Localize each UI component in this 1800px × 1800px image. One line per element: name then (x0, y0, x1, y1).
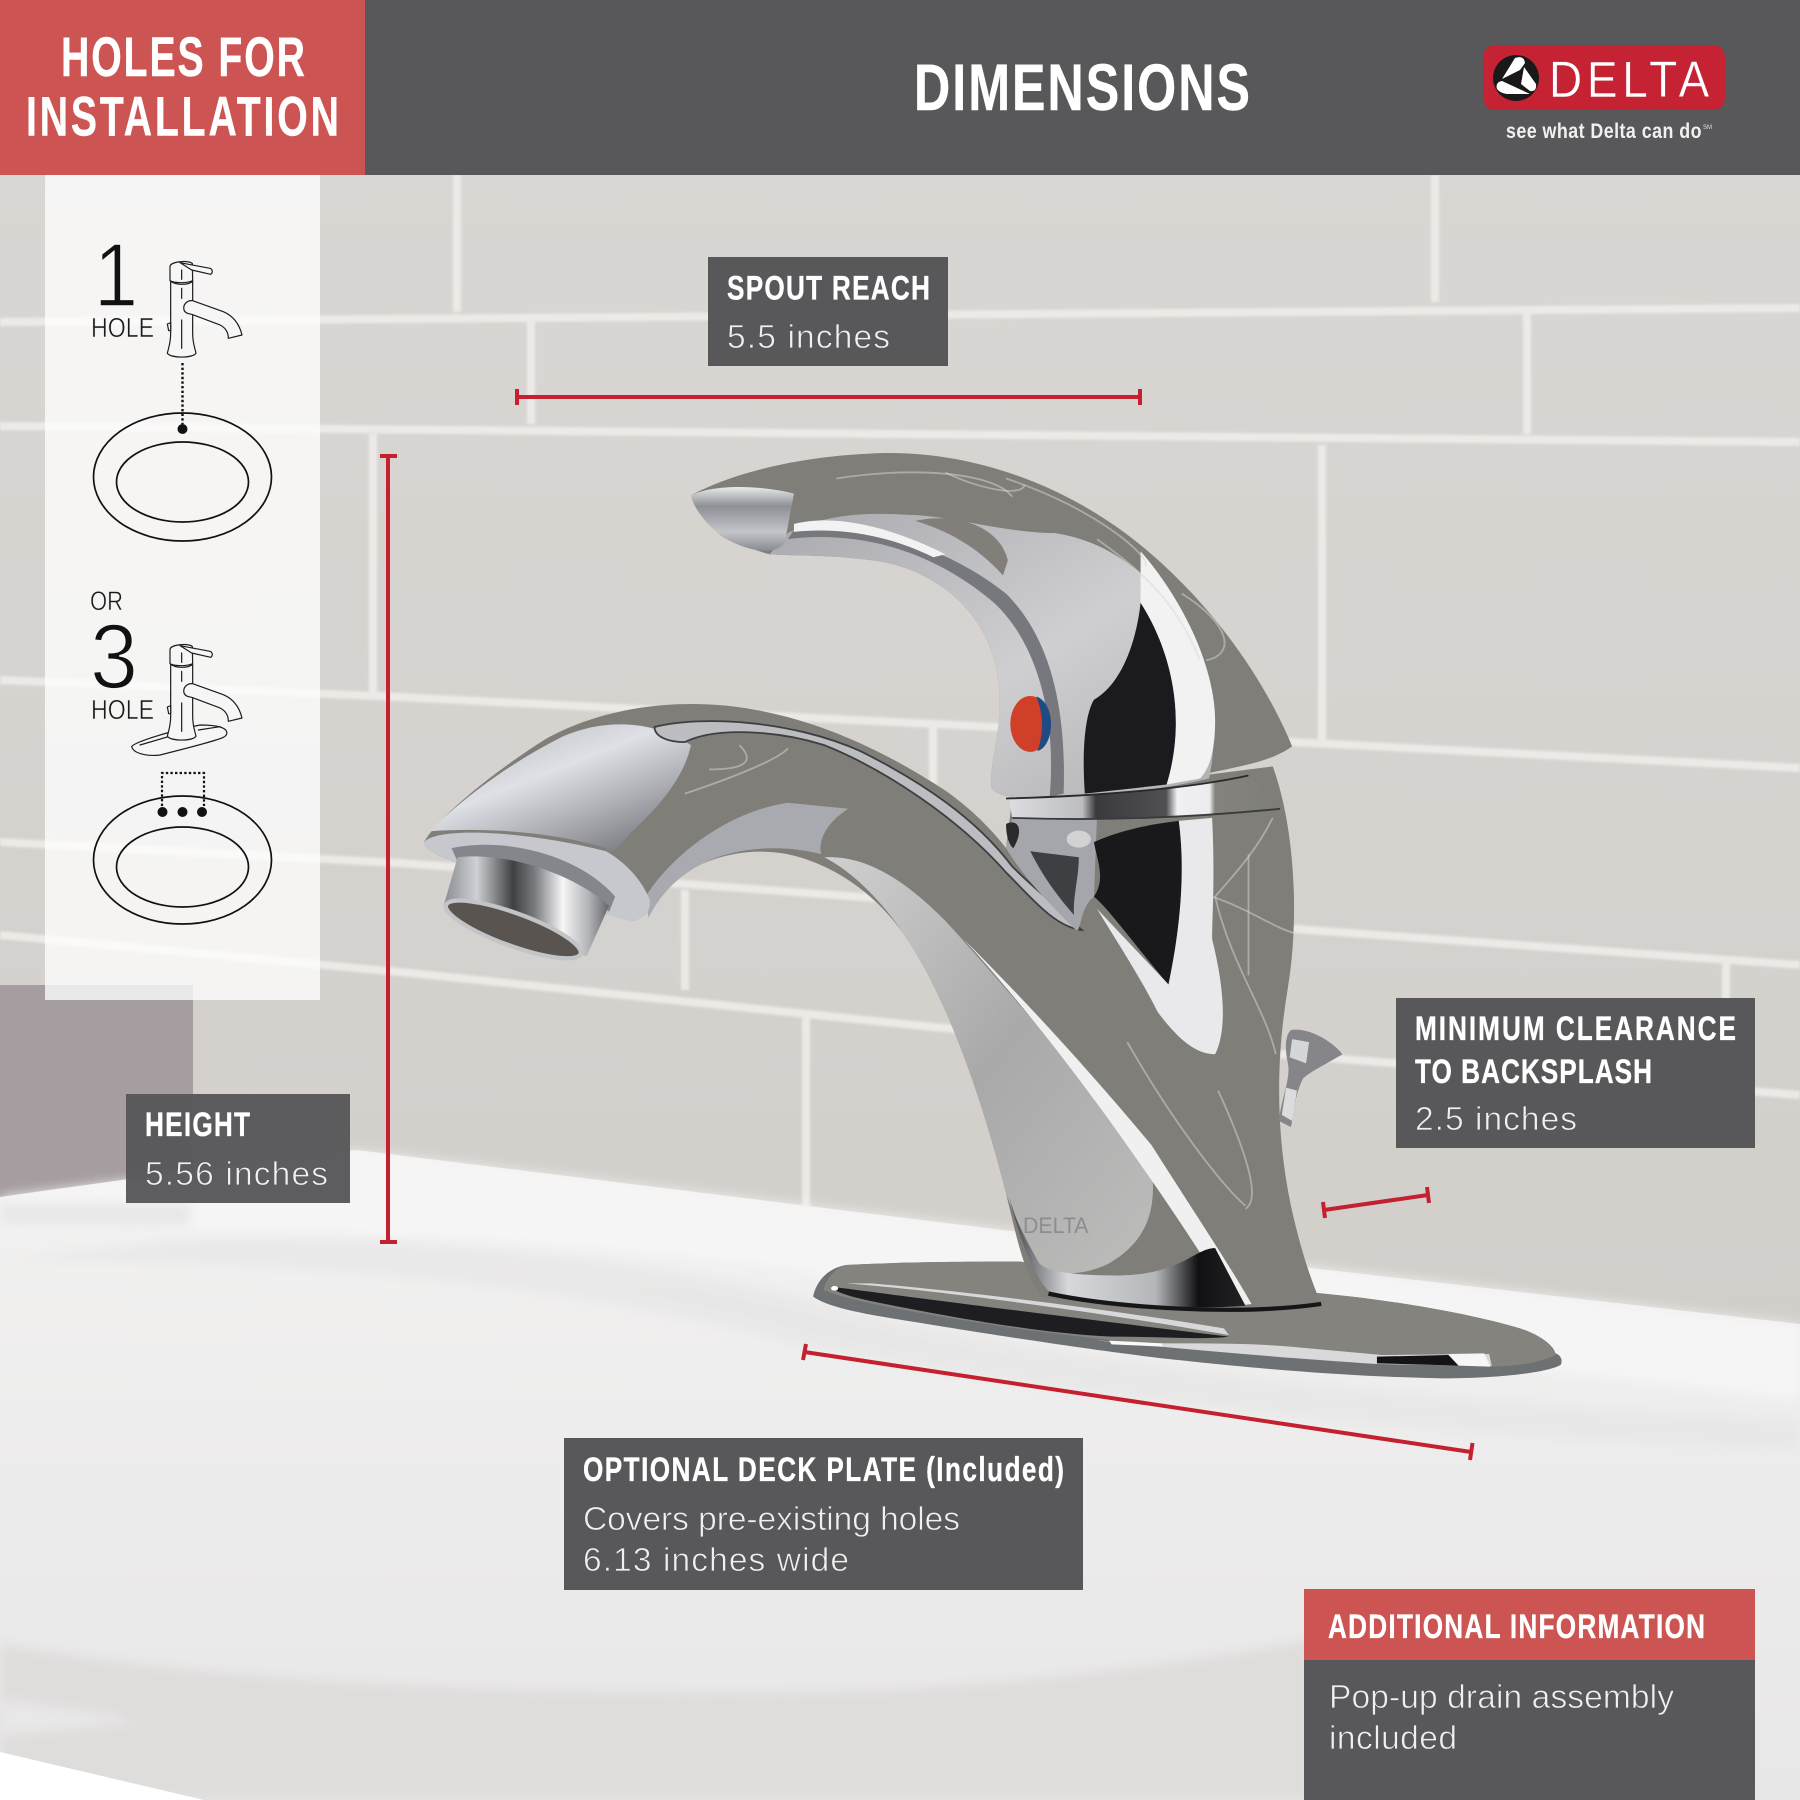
brand logo: DELTA (1549, 52, 1710, 109)
brand logo: see what Delta can do (1506, 120, 1702, 143)
background: tile wall (0, 0, 1800, 1340)
emboss: DELTA (1023, 1213, 1089, 1238)
callout: spout reach: 5.5 inches (727, 319, 890, 356)
spout white edge (964, 939, 1252, 1306)
spout front face (824, 857, 1153, 1273)
deck plate (813, 1262, 1562, 1378)
callout: height: 5.56 inches (145, 1156, 328, 1193)
callout: additional information: ADDITIONAL INFORMATION (1328, 1609, 1705, 1646)
header title: DIMENSIONS (914, 51, 1250, 125)
callout: spout reach: SPOUT REACH (727, 270, 930, 307)
handle chrome (770, 514, 1214, 798)
callout: minimum clearance: 2.5 inches (1415, 1101, 1577, 1138)
label: hole: HOLE (91, 312, 154, 343)
handle white reflection (1141, 551, 1215, 785)
callout: optional deck plate: OPTIONAL DECK PLATE (Included) (583, 1452, 1064, 1489)
spout front rim (424, 833, 650, 921)
brand logo: SM (1703, 125, 1712, 131)
callout: additional information: Pop-up drain assembly (1329, 1679, 1674, 1716)
icon: sink with one hole (94, 413, 272, 541)
body chrome junction (1006, 818, 1097, 930)
callout: optional deck plate: 6.13 inches wide (583, 1542, 849, 1579)
dimension line: deck plate (803, 1344, 1472, 1460)
dimension line: height (380, 456, 397, 1242)
junction dark reflections (1006, 822, 1091, 915)
drain lift knob (1279, 1030, 1342, 1127)
callout: optional deck plate: Covers pre-existing holes (583, 1501, 960, 1538)
brand logo (1483, 45, 1725, 143)
base collar chrome (1009, 1197, 1245, 1307)
header: holes for installation: HOLES FOR (61, 26, 305, 89)
icon: three hole faucet with deck plate (132, 645, 242, 755)
handle gray reflection (915, 518, 1008, 575)
spout bright front (430, 724, 691, 852)
label: or: OR (90, 586, 123, 616)
callout: minimum clearance: TO BACKSPLASH (1415, 1054, 1652, 1091)
panel: holes for installation (45, 175, 320, 1000)
callout: height: HEIGHT (145, 1107, 250, 1144)
body dark reflection (1094, 821, 1182, 985)
header bar (0, 0, 1800, 175)
dimension line: minimum clearance (1323, 1187, 1429, 1218)
icon: dotted guide to three holes (162, 773, 204, 806)
hot and cold indicator (1010, 696, 1051, 752)
faucet body and spout silhouette (424, 704, 1322, 1312)
number 1: 1 (94, 226, 138, 326)
icon: single hole faucet (167, 262, 242, 357)
callout: additional information: included (1329, 1720, 1457, 1757)
dimension line: spout reach (517, 389, 1140, 405)
handle swirl lines (836, 472, 1225, 660)
aerator (441, 845, 615, 969)
label: hole: HOLE (91, 694, 154, 725)
spout lower arm (645, 803, 848, 918)
header: holes for installation: INSTALLATION (26, 86, 339, 148)
icon: sink with three holes (94, 796, 272, 924)
icon: dotted guide to single hole (181, 363, 184, 424)
callout: minimum clearance: MINIMUM CLEARANCE (1415, 1011, 1736, 1048)
callout: spout reach (708, 257, 948, 366)
number 3: 3 (90, 606, 138, 708)
base black line (1048, 1294, 1321, 1310)
handle shaded strip (788, 527, 1064, 797)
background: white sink basin (0, 1150, 1800, 1800)
handle dark reflection (1084, 603, 1176, 794)
faucet (424, 453, 1342, 1312)
collar band (1006, 774, 1280, 819)
callout: height (126, 1094, 350, 1203)
handle highlight strip (794, 520, 945, 557)
handle silhouette (691, 453, 1292, 798)
callout: additional information (1304, 1589, 1755, 1800)
handle tip (691, 487, 794, 551)
header: holes for installation (0, 0, 365, 175)
spout top ridge (655, 721, 1082, 930)
callout: optional deck plate (564, 1438, 1083, 1590)
body white reflection (1097, 818, 1223, 1054)
reflection swirls (685, 745, 1294, 1209)
callout: minimum clearance (1396, 998, 1755, 1148)
